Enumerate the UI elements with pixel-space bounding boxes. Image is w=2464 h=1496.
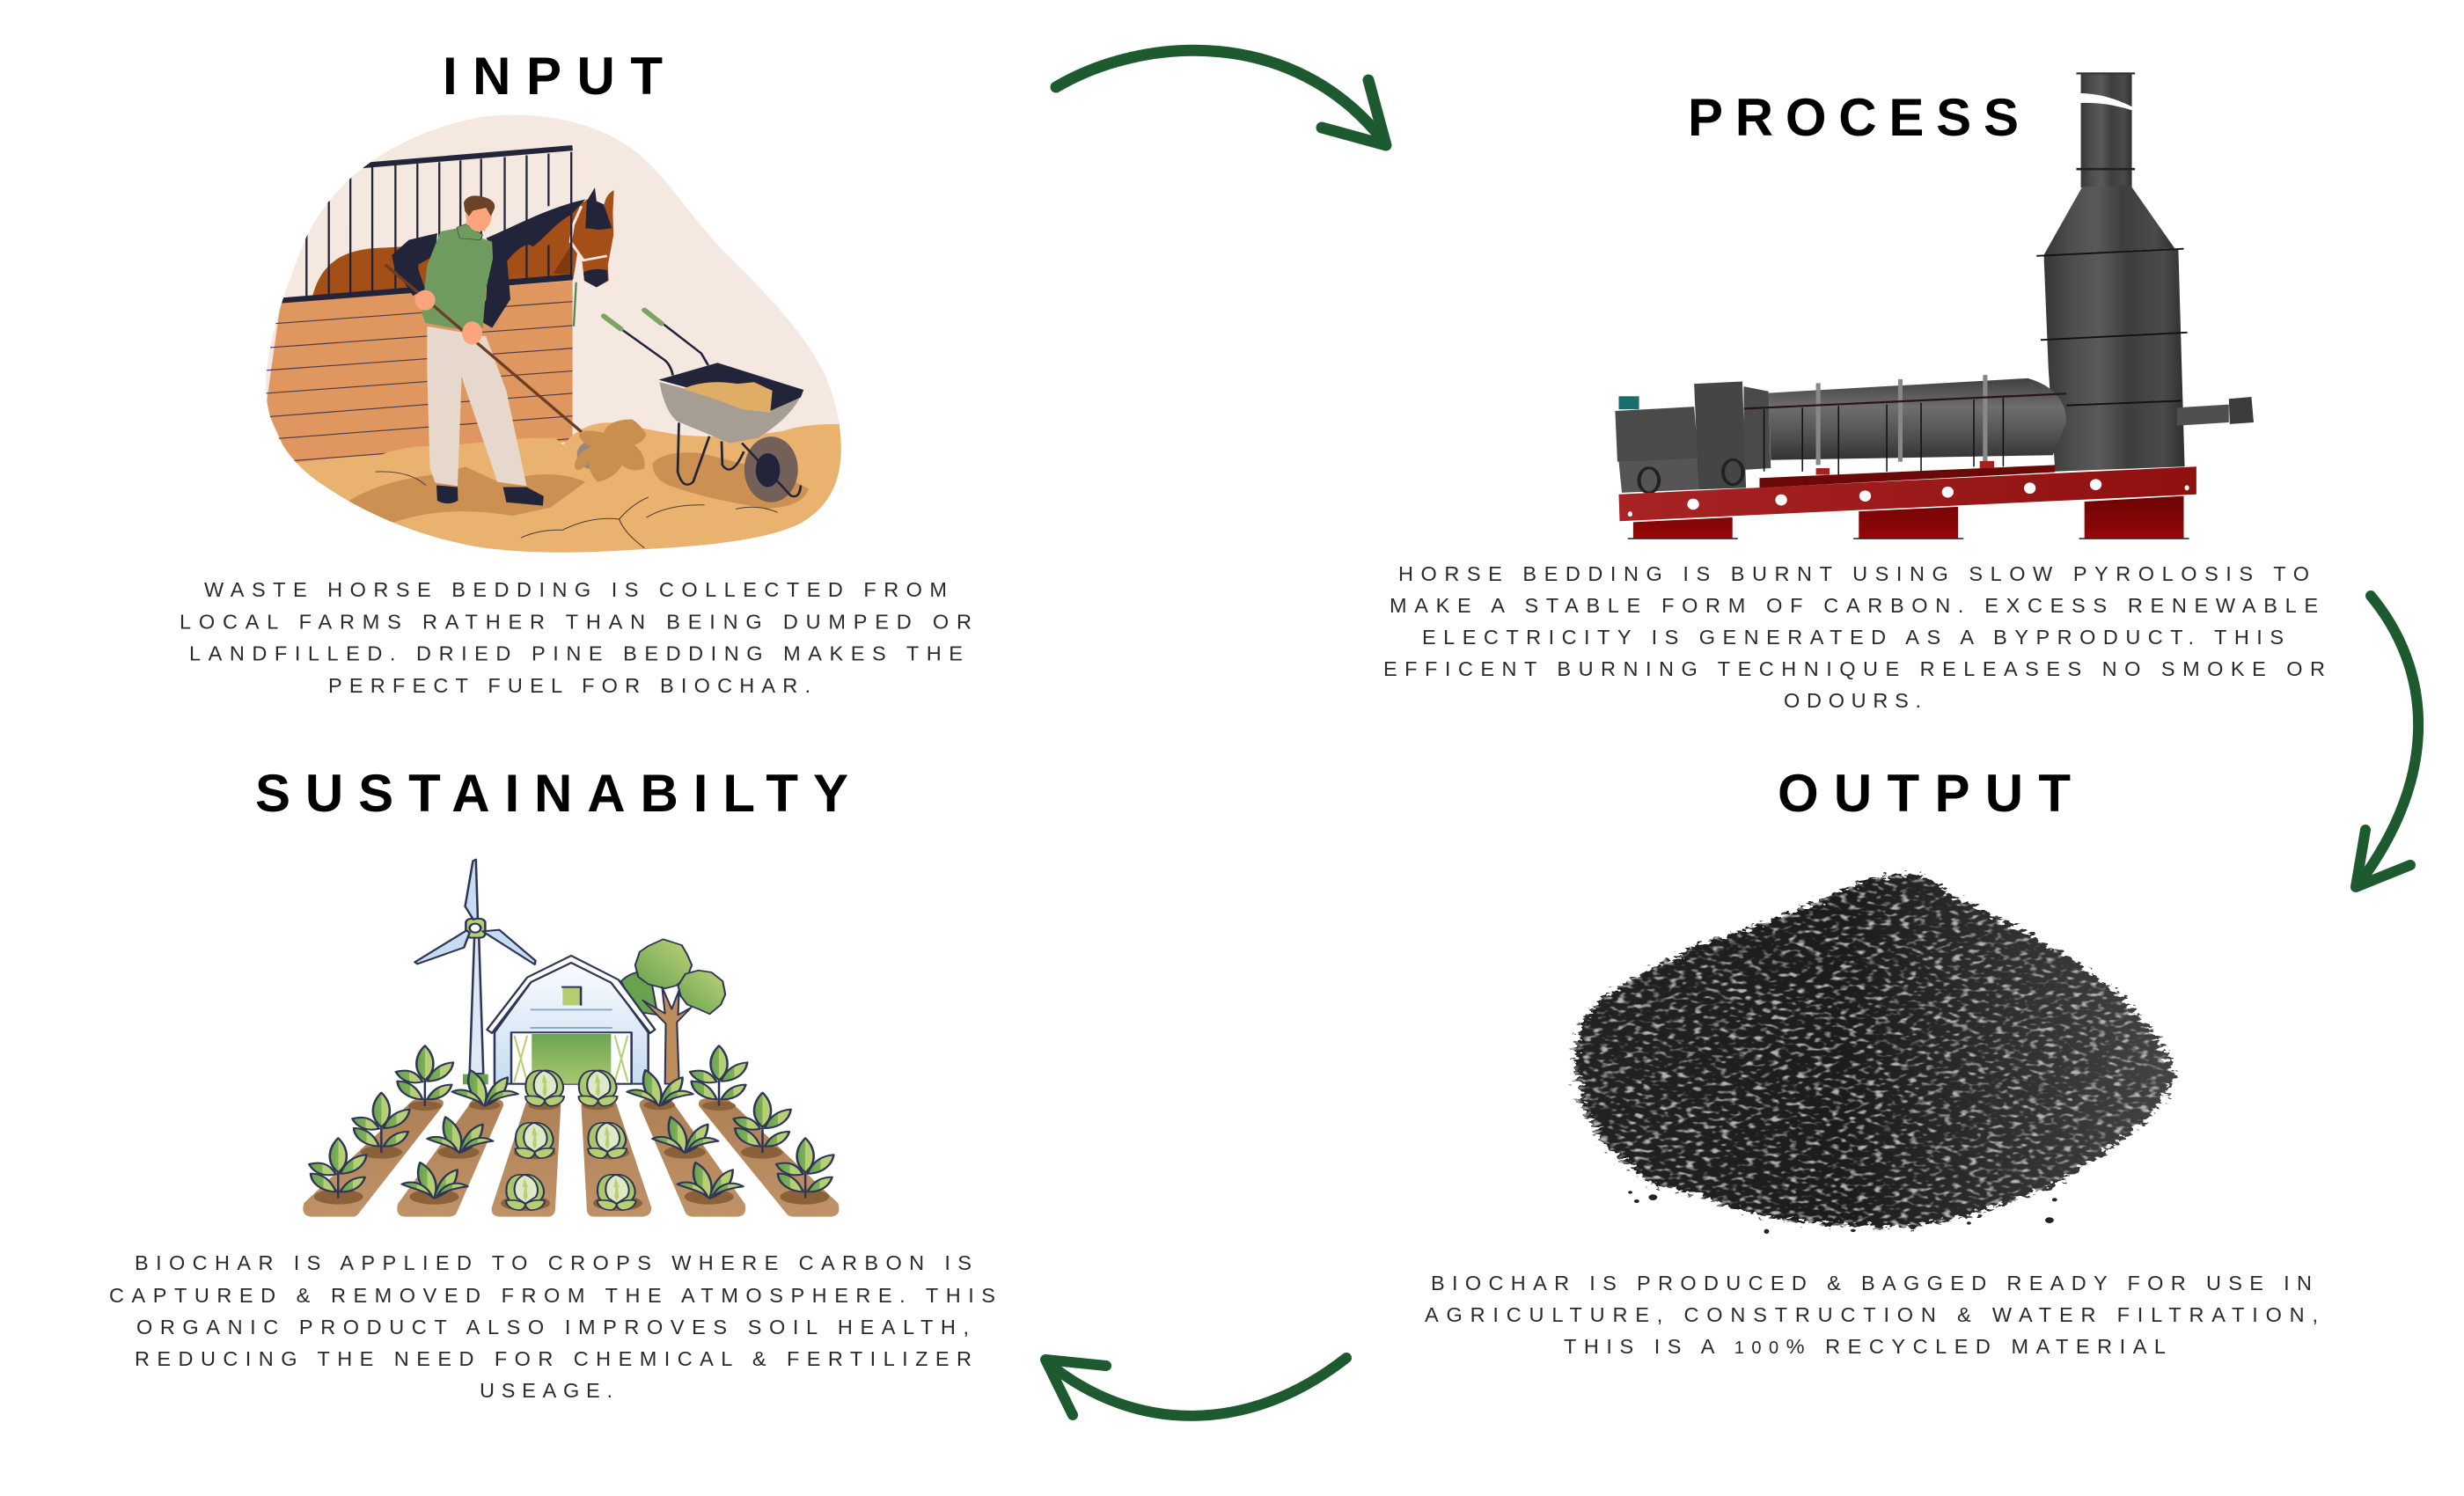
rake with straw	[575, 420, 647, 482]
heading: input: INPUT	[443, 47, 663, 106]
description: sustainability: REDUCING THE NEED FOR CHEMICAL & FERTILIZER	[135, 1347, 972, 1370]
description: process: HORSE BEDDING IS BURNT USING SLOW PYROLOSIS TO	[1398, 562, 2309, 585]
horse	[312, 187, 614, 326]
stable background blob	[266, 114, 841, 553]
chimney	[2076, 72, 2135, 187]
cone and furnace body	[2036, 186, 2188, 472]
illustration: pyrolysis machine	[1615, 72, 2254, 539]
panel: input	[180, 47, 972, 697]
stable, horse and bedding scene	[246, 148, 847, 576]
description: process: MAKE A STABLE FORM OF CARBON. EXCESS RENEWABLE	[1390, 594, 2318, 617]
illustration: farm with wind turbine	[303, 860, 839, 1217]
side motor	[2177, 397, 2254, 426]
hay shadows	[344, 466, 585, 524]
panel: sustainability	[109, 764, 995, 1402]
description: input	[180, 578, 972, 697]
seedlings, middle rows	[402, 1070, 744, 1199]
heading: output: OUTPUT	[1778, 764, 2071, 823]
description: input: PERFECT FUEL FOR BIOCHAR.	[328, 674, 810, 697]
hay ground	[297, 422, 841, 553]
heading: sustainability: SUSTAINABILTY	[255, 764, 848, 823]
arrow: process to output	[2356, 596, 2418, 887]
panel: process	[1383, 72, 2325, 712]
illustration: farmer collecting horse bedding	[246, 114, 847, 576]
red base frame	[1618, 461, 2196, 539]
soil rows	[303, 1098, 839, 1217]
description: process: ODOURS.	[1784, 689, 1921, 712]
description: output	[1425, 1272, 2318, 1358]
barn	[487, 956, 655, 1084]
rotating drum	[1744, 375, 2066, 474]
feed box and hopper	[1615, 382, 1746, 493]
description: output: THIS IS A 100 % RECYCLED MATERIAL	[1564, 1335, 2166, 1358]
arrow: input to process	[1056, 50, 1386, 145]
wooden wall	[266, 281, 573, 464]
fence rail and bars	[281, 148, 573, 301]
description: sustainability: ORGANIC PRODUCT ALSO IMPROVES SOIL HEALTH,	[136, 1316, 969, 1338]
tree	[621, 939, 725, 1084]
description: process	[1383, 562, 2325, 712]
leafy plants, outer rows	[309, 1045, 833, 1199]
description: process: ELECTRICITY IS GENERATED AS A BYPRODUCT. THIS	[1422, 626, 2284, 649]
wind turbine	[414, 860, 535, 1084]
illustration: biochar pile	[1574, 873, 2177, 1234]
panel: output	[1425, 764, 2318, 1358]
description: sustainability: CAPTURED & REMOVED FROM THE ATMOSPHERE. THIS	[109, 1284, 995, 1307]
description: input: LANDFILLED. DRIED PINE BEDDING MAKES THE	[189, 642, 963, 665]
description: sustainability	[109, 1251, 995, 1402]
farmer	[385, 195, 582, 506]
description: output: AGRICULTURE, CONSTRUCTION & WATER FILTRATION,	[1425, 1303, 2318, 1326]
lettuces, centre rows	[506, 1070, 636, 1210]
description: input: LOCAL FARMS RATHER THAN BEING DUMPED OR	[180, 611, 972, 634]
scattered grains	[1628, 1191, 2057, 1234]
planting holes	[314, 1101, 829, 1211]
heading: process: PROCESS	[1688, 88, 2019, 147]
arrow: output to sustainability	[1045, 1358, 1346, 1416]
description: sustainability: USEAGE.	[480, 1379, 612, 1402]
description: output: BIOCHAR IS PRODUCED & BAGGED READY FOR USE IN	[1431, 1272, 2312, 1294]
description: process: EFFICENT BURNING TECHNIQUE RELEASES NO SMOKE OR	[1383, 657, 2325, 680]
description: sustainability: BIOCHAR IS APPLIED TO CROPS WHERE CARBON IS	[135, 1251, 972, 1274]
wheelbarrow	[604, 310, 803, 502]
description: input: WASTE HORSE BEDDING IS COLLECTED FROM	[204, 578, 947, 601]
